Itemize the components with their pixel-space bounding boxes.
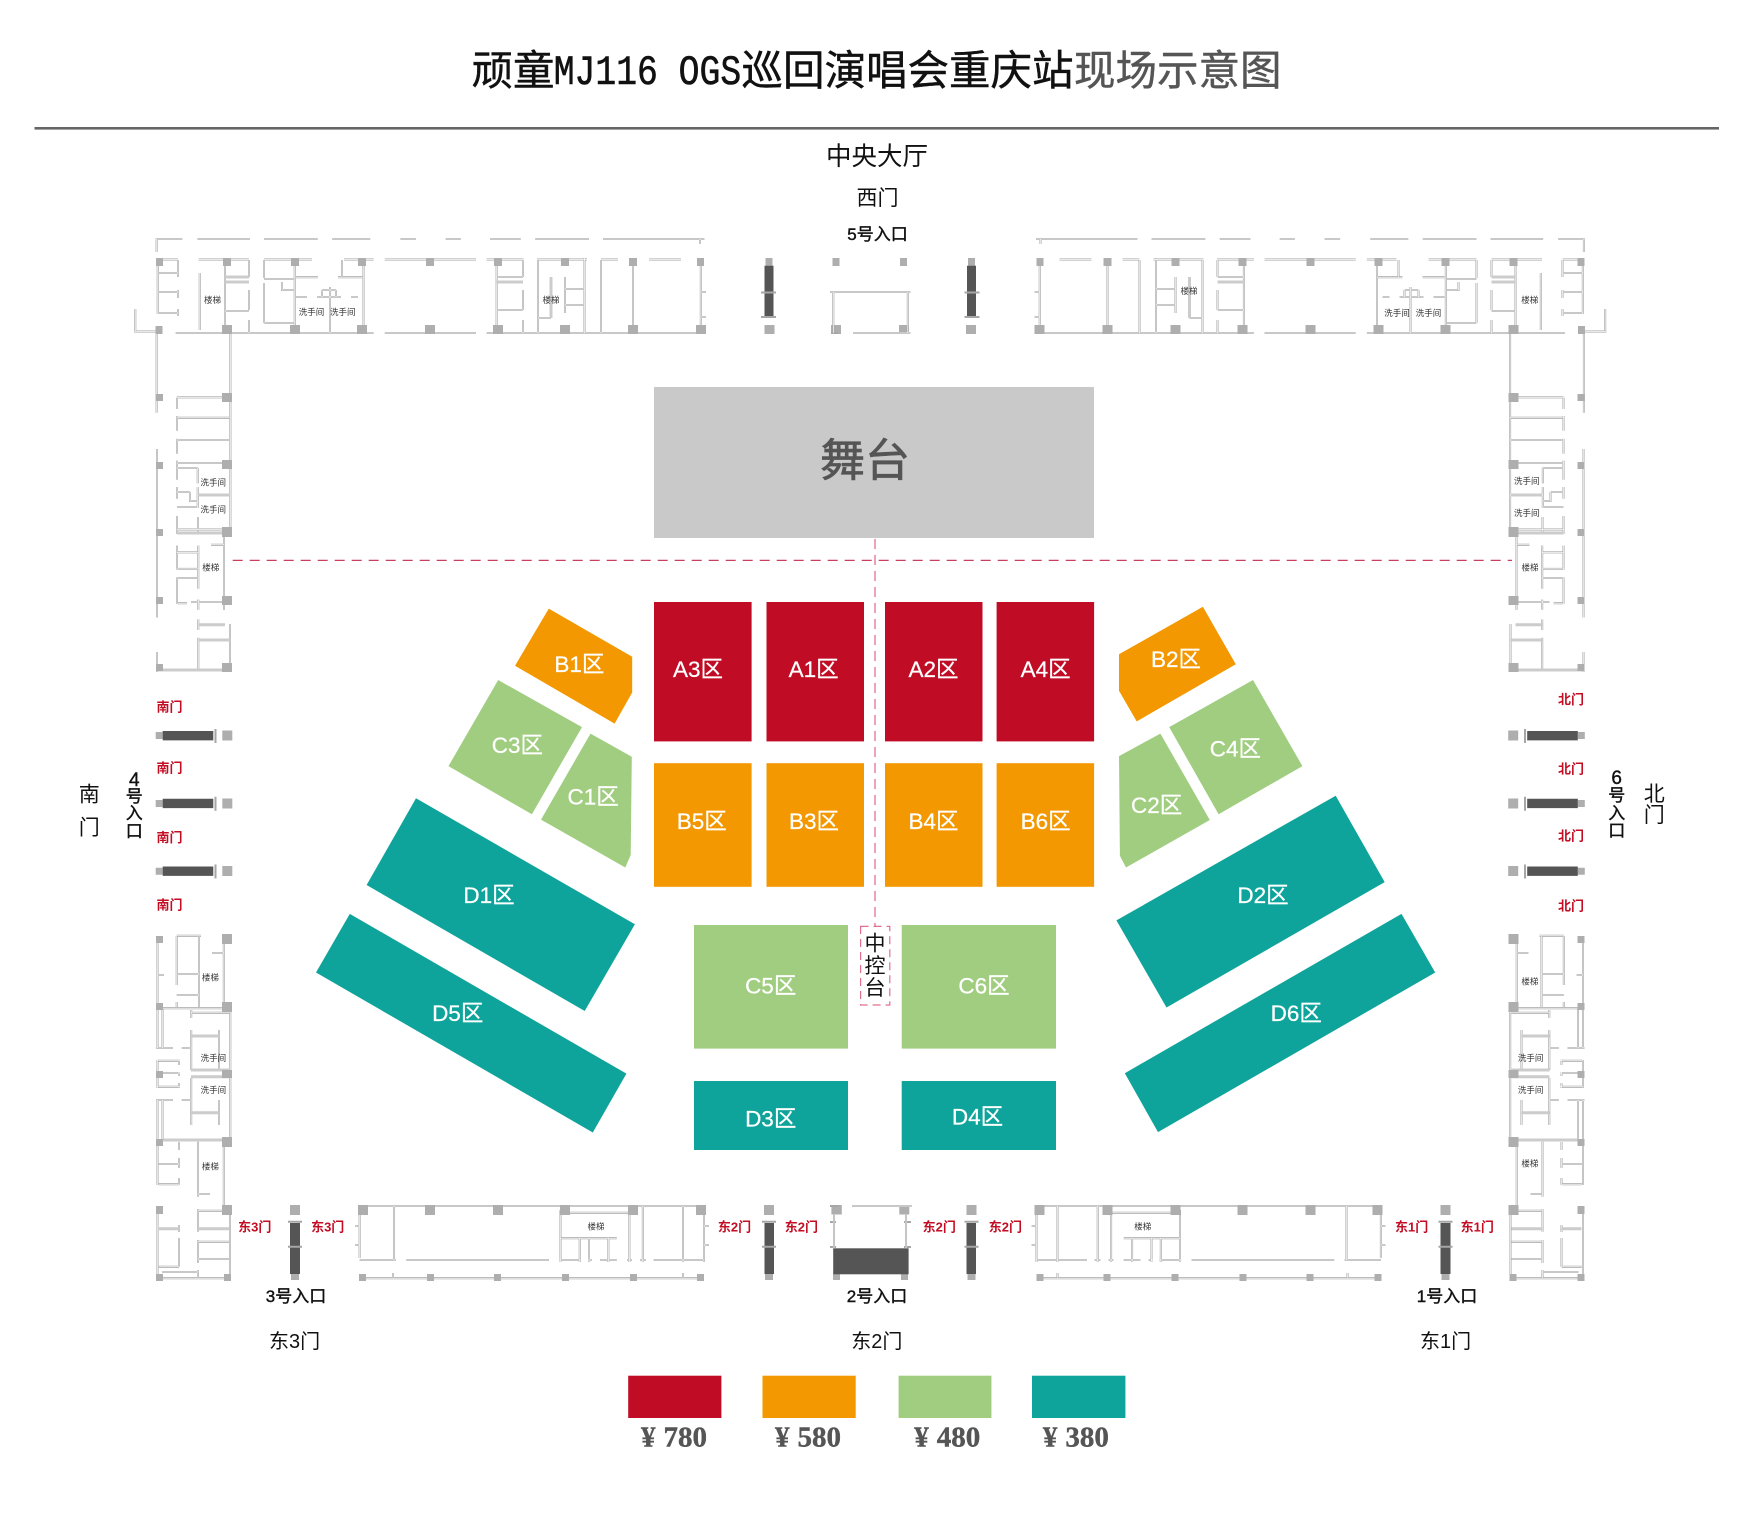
red labels: east doors: 东1门	[1461, 1220, 1494, 1234]
room labels: 洗手间	[201, 1085, 226, 1095]
room labels: 楼梯	[587, 1222, 605, 1232]
seating: C zones: C2区	[1131, 793, 1182, 818]
seating: C zones	[448, 680, 1302, 1049]
label: entrance 6: 口	[1608, 822, 1625, 840]
seating: D zones: D5区	[432, 1001, 483, 1026]
red labels: north doors: 北门	[1558, 898, 1584, 914]
label: entrance 6: 号	[1608, 786, 1625, 805]
seating: B zones: B4区	[908, 809, 959, 834]
title: 现场示意图	[1074, 47, 1282, 94]
room labels: 楼梯	[1521, 563, 1539, 573]
red labels: east doors: 东2门	[785, 1220, 818, 1234]
seating: A zones	[654, 602, 1094, 741]
red labels: south doors: 南门	[156, 700, 183, 714]
room labels	[201, 286, 1543, 1232]
room labels: 洗手间	[1514, 508, 1539, 518]
label: entrance 4	[126, 770, 143, 841]
seating: D zones: D2区	[1237, 883, 1289, 908]
room labels: 洗手间	[1384, 308, 1410, 318]
seating: C zones: C5区	[745, 974, 796, 999]
legend: price 480: ¥ 480	[914, 1422, 980, 1454]
stage: 舞台	[820, 435, 910, 486]
room labels: 楼梯	[1134, 1222, 1152, 1232]
stage	[654, 387, 1094, 538]
floor plan: left half	[135, 239, 776, 1281]
control desk: 中	[864, 932, 886, 956]
label: entrance 1: 1号入口	[1417, 1287, 1477, 1306]
label: entrance 2: 2号入口	[847, 1287, 907, 1306]
seating: B zones: B5区	[677, 809, 727, 834]
red labels: east doors: 东2门	[923, 1220, 956, 1234]
room labels: 洗手间	[1514, 476, 1539, 486]
title: 巡回演唱会重庆站	[742, 47, 1074, 94]
title	[472, 47, 1282, 97]
heading: central hall: 中央大厅	[826, 143, 928, 171]
control desk: 台	[864, 977, 886, 1000]
room labels: 楼梯	[204, 295, 221, 305]
room labels: 楼梯	[202, 1162, 219, 1172]
room labels: 洗手间	[201, 504, 226, 514]
room labels: 洗手间	[201, 478, 226, 488]
label: south gate: 门	[79, 816, 100, 840]
room labels: 楼梯	[542, 295, 560, 305]
red labels: south doors: 南门	[156, 830, 183, 845]
red labels: north doors: 北门	[1558, 828, 1584, 844]
label: south gate: 南	[79, 784, 100, 806]
title: MJ116 OGS	[554, 49, 741, 97]
red labels: north doors: 北门	[1558, 692, 1584, 707]
room labels: 楼梯	[1521, 295, 1539, 305]
seating: A zones: A1区	[789, 657, 839, 682]
seating: A zones: A2区	[908, 657, 959, 682]
seating: B zones: B2区	[1151, 647, 1201, 672]
legend: price 380: ¥ 380	[1043, 1422, 1109, 1454]
red labels: east doors: 东2门	[718, 1220, 751, 1234]
legend: price 580	[762, 1376, 856, 1454]
seating: C zones: C1区	[567, 784, 619, 809]
room labels: 洗手间	[1518, 1053, 1543, 1063]
seating: C zones: C3区	[492, 733, 543, 758]
room labels: 楼梯	[1180, 286, 1198, 296]
room labels: 楼梯	[1521, 977, 1539, 987]
red labels: south doors: 南门	[156, 760, 183, 776]
room labels: 楼梯	[202, 973, 219, 983]
label: entrance 6: 6	[1611, 768, 1622, 789]
seating: C zones: C4区	[1210, 737, 1261, 762]
control desk	[861, 926, 890, 1005]
seating: B zones	[515, 607, 1236, 887]
room labels: 洗手间	[299, 307, 324, 317]
room labels: 洗手间	[1416, 308, 1441, 318]
label: entrance 4: 4	[129, 770, 140, 791]
floor plan: center west room	[830, 258, 910, 334]
seating: B zones: B1区	[554, 652, 604, 677]
seating: A zones: A4区	[1021, 657, 1071, 682]
red labels: north doors: 北门	[1558, 762, 1584, 776]
room labels: 洗手间	[1518, 1085, 1543, 1095]
label: east gate 2: 东2门	[851, 1330, 902, 1353]
room labels: 楼梯	[1521, 1159, 1539, 1169]
label: north gate: 门	[1644, 804, 1665, 827]
label: entrance 5: 5号入口	[847, 225, 908, 244]
room labels: 楼梯	[202, 563, 220, 573]
title: 顽童	[472, 47, 555, 94]
red labels: south doors	[156, 700, 183, 912]
red labels: east doors: 东1门	[1395, 1220, 1428, 1234]
floor plan: center east entrance	[830, 1205, 912, 1280]
red labels: east doors	[238, 1220, 1494, 1234]
room labels: 洗手间	[330, 307, 356, 317]
seating: D zones	[316, 796, 1435, 1150]
legend: price 480	[899, 1376, 991, 1454]
legend: price 780: ¥ 780	[641, 1422, 707, 1454]
red labels: north doors	[1558, 692, 1584, 914]
label: north gate: 北	[1644, 783, 1665, 806]
seating: D zones: D6区	[1271, 1001, 1322, 1026]
label: entrance 3: 3号入口	[266, 1287, 326, 1306]
label: entrance 4: 号	[126, 787, 143, 806]
dashed center lines	[233, 539, 1512, 926]
floor plan: right half	[964, 239, 1605, 1281]
label: entrance 6: 入	[1608, 804, 1625, 823]
seating: B zones: B6区	[1021, 809, 1071, 834]
label: east gate 3: 东3门	[269, 1330, 320, 1353]
legend: price 780	[628, 1376, 721, 1454]
red labels: east doors: 东2门	[989, 1220, 1022, 1234]
room labels: 洗手间	[201, 1053, 226, 1063]
seating: A zones: A3区	[673, 657, 723, 682]
label: entrance 6	[1608, 768, 1625, 840]
red labels: east doors: 东3门	[238, 1220, 271, 1234]
legend: price 380	[1032, 1376, 1125, 1454]
label: north gate	[1644, 783, 1665, 827]
label: south gate	[79, 784, 100, 840]
label: entrance 4: 口	[126, 822, 143, 841]
control desk: 控	[864, 955, 886, 978]
red labels: south doors: 南门	[156, 898, 183, 912]
seating: D zones: D3区	[745, 1107, 796, 1132]
seating: D zones: D1区	[463, 883, 515, 908]
label: east gate 1: 东1门	[1420, 1330, 1471, 1353]
red labels: east doors: 东3门	[311, 1220, 344, 1234]
legend: price 580: ¥ 580	[775, 1422, 841, 1454]
label: west gate: 西门	[856, 187, 898, 210]
seating: D zones: D4区	[952, 1104, 1003, 1129]
seating: B zones: B3区	[789, 809, 839, 834]
seating: C zones: C6区	[958, 974, 1010, 999]
label: entrance 4: 入	[126, 804, 143, 823]
